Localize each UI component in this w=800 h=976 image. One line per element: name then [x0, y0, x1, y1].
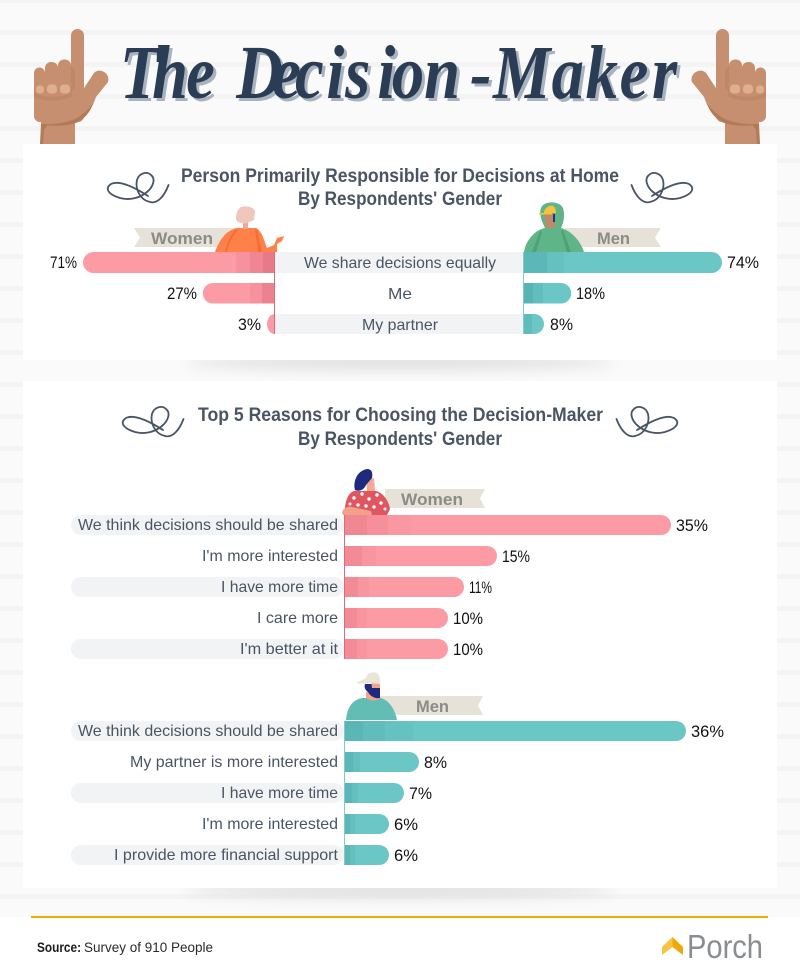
values: men reasons: 6% [394, 815, 418, 834]
row labels: men reasons [78, 723, 339, 864]
heading: top 5 reasons: By Respondents' Gender [298, 429, 503, 450]
values: women home decisions: 3% [238, 315, 261, 334]
chart: men reasons [344, 721, 686, 865]
values: women reasons: 10% [453, 640, 483, 659]
chart: women home decisions [83, 252, 275, 334]
row labels: men reasons: I have more time [221, 785, 338, 802]
title: Decision-Maker [238, 34, 681, 118]
panel shadow: lower panel [185, 883, 615, 897]
men ribbon: Men [416, 697, 449, 716]
source note: Source: [37, 939, 81, 955]
row labels: men reasons: We think decisions should be shared [78, 723, 338, 740]
heading: top 5 reasons [198, 405, 604, 450]
panel: decisions at home [23, 144, 777, 360]
icon: left swirl [123, 407, 184, 436]
row labels: men reasons: My partner is more interested [130, 754, 338, 771]
values: men reasons [394, 722, 724, 865]
heading: top 5 reasons: Top 5 Reasons for Choosing the Decision-Maker [198, 405, 604, 426]
values: women reasons: 11% [469, 578, 492, 597]
women ribbon: Women [151, 229, 213, 248]
values: women home decisions: 71% [50, 253, 77, 272]
row labels: women reasons: I'm more interested [202, 548, 338, 565]
heading: decisions at home: Person Primarily Responsible for Decisions at Home [181, 166, 619, 187]
values: men reasons: 36% [691, 722, 724, 741]
source note: Survey of 910 People [84, 939, 213, 955]
title: Decision-Maker [235, 31, 678, 115]
figure: woman in orange [215, 206, 284, 252]
chart: men home decisions [523, 252, 722, 334]
heading: decisions at home [181, 166, 619, 210]
label bands [275, 252, 523, 334]
values: women reasons [453, 516, 708, 659]
label bands: women reasons [71, 515, 344, 659]
title: The [120, 31, 215, 115]
icon: left pointing hand [34, 29, 108, 144]
heading: decisions at home: By Respondents' Gender [298, 189, 503, 210]
values: men home decisions: 18% [576, 284, 605, 303]
row labels: home decisions [304, 255, 496, 334]
men ribbon [378, 696, 483, 716]
values: women home decisions [50, 253, 261, 334]
men ribbon: Men [597, 229, 630, 248]
row labels: women reasons: I have more time [221, 579, 338, 596]
figure: man in green hood [524, 202, 584, 252]
icon: left swirl [108, 173, 168, 202]
row labels: men reasons: I provide more financial support [114, 847, 339, 864]
values: men home decisions [550, 253, 759, 334]
values: women reasons: 10% [453, 609, 483, 628]
icon: right pointing hand [692, 29, 766, 144]
values: women reasons: 35% [676, 516, 708, 535]
panel: top 5 reasons [23, 381, 777, 888]
footer divider [31, 916, 768, 918]
row labels: women reasons: I'm better at it [240, 641, 339, 658]
logo: Porch [662, 928, 763, 965]
figure: woman in polka dots [342, 469, 390, 515]
chart: women reasons [344, 515, 671, 659]
women ribbon: Women [401, 490, 463, 509]
row labels: women reasons: I care more [257, 610, 338, 627]
figure: man with beard and cap [346, 672, 397, 720]
men ribbon [565, 228, 661, 248]
row labels: men reasons: I'm more interested [202, 816, 338, 833]
row labels: home decisions: My partner [362, 317, 439, 334]
logo: Porch: Porch [687, 928, 763, 965]
values: men reasons: 8% [424, 753, 447, 772]
values: men home decisions: 8% [550, 315, 573, 334]
row labels: home decisions: We share decisions equally [304, 255, 496, 272]
row labels: women reasons [78, 517, 339, 658]
women ribbon [134, 228, 240, 248]
values: men reasons: 6% [394, 846, 418, 865]
values: men reasons: 7% [409, 784, 432, 803]
values: women home decisions: 27% [167, 284, 197, 303]
row labels: women reasons: We think decisions should be shared [78, 517, 338, 534]
label bands: men reasons [71, 721, 344, 865]
row labels: home decisions: Me [388, 286, 412, 303]
women ribbon [385, 489, 485, 509]
title: The [123, 34, 218, 118]
values: women reasons: 15% [502, 547, 530, 566]
icon: right swirl [632, 173, 692, 202]
values: men home decisions: 74% [727, 253, 759, 272]
panel shadow: top panel [185, 355, 615, 369]
icon: right swirl [616, 407, 677, 436]
